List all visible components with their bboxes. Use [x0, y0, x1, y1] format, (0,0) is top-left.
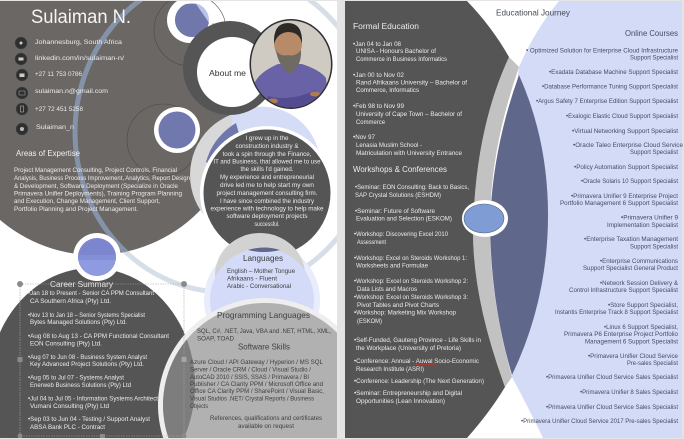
panel: career summary circle — [0, 268, 195, 438]
text: contact details: linkedin.com/in/sulaiman-n/ — [35, 55, 124, 62]
text: workshops list: Worksheets and Formulae — [356, 262, 428, 270]
panel: languages — [204, 233, 320, 316]
text: expertise list: and Execution, Change Management, Client Support, — [14, 198, 160, 205]
text: software list: AutoCAD 2010 / SSIS, SSAS / Primavera / BI — [190, 374, 309, 381]
text: online courses list: Implementation Specialist — [607, 222, 678, 229]
panel: online courses background — [500, 1, 682, 438]
text: online courses list: •Oracle Taleo Enterprise Cloud Service — [573, 142, 683, 149]
text: about me body — [210, 135, 324, 228]
text: languages list — [227, 268, 295, 288]
heading: programming languages: Programming Languages — [217, 310, 310, 320]
text: contact details: +27 72 451 5258 — [35, 106, 83, 113]
text: about me body: construction industry & — [236, 143, 299, 150]
text: career list: •Sep 03 to Jun 04 - Testing / Support Analyst — [28, 416, 150, 423]
text: workshops list: •Workshop: Excel on Steroids Workshop 2: — [354, 278, 468, 285]
text: online courses list: Instantis Enterprise Track 8 Support Specialist — [555, 309, 678, 316]
text: contact details — [35, 39, 124, 131]
text: about me body: successful. — [254, 221, 280, 228]
text: workshops list: Data Lists and Macros — [357, 286, 418, 293]
heading: workshops and conferences: Workshops & Conferences — [353, 164, 447, 174]
text: references note: available on request — [238, 423, 294, 430]
text: languages list: English – Mother Tongue — [227, 268, 295, 275]
text: software list: Azure Cloud / API Gateway / Hyperion / MS SQL — [190, 359, 323, 366]
text: references note: References, qualifications and certificates — [210, 415, 323, 422]
text: about me body: drive led me to help start my own — [220, 182, 314, 189]
text: about me body: experience with technology to help make — [210, 206, 324, 212]
text: workshops list: Research Institute (ASRI) — [356, 366, 424, 373]
text: career list: CA Southern Africa (Pty) Ltd. — [30, 298, 111, 305]
heading: about me: About me — [209, 69, 247, 78]
text: career list: ABSA Bank PLC - Contract — [30, 424, 105, 431]
decorative ring, light section — [123, 1, 337, 293]
text: workshops list: •Self-Funded, Gauteng Province - Life Skills in — [354, 337, 481, 344]
text: online courses list: Primavera P6 Enterprise Project Portfolio — [564, 331, 678, 338]
panel: header and expertise circle — [0, 1, 230, 254]
text: workshops list: •Conference: Leadership (The Next Generation) — [354, 378, 484, 385]
text: formal education list: •Feb 98 to Nov 99 — [353, 103, 404, 110]
text: online courses list: •Virtual Networking Support Specialist — [572, 128, 678, 135]
outline circle middle — [127, 104, 199, 176]
text: workshops list: Assessment — [357, 239, 386, 246]
text: workshops list: •Workshop: Discovering Excel 2010 — [354, 231, 448, 238]
text: programming list: SOAP, TOAD — [197, 336, 234, 342]
text: online courses list: •Exadata Database Machine Support Specialist — [549, 69, 678, 76]
text: formal education list: Matriculation with University Entrance — [356, 150, 462, 157]
text: online courses list: Control Infrastructure Support Specialist — [569, 287, 678, 294]
text: software list: Server / Oracle CRM / Cloud / Visual Studio / — [190, 366, 311, 374]
text: career list: •Aug 08 to Aug 13 - CA PPM Functional Consultant — [28, 333, 169, 340]
bubble: centre blue ellipse — [462, 200, 508, 237]
text: career list: Key Advanced Project Solutions (Pty) Ltd. — [30, 361, 144, 368]
text: languages list: Arabic - Conversational — [227, 283, 292, 290]
icons: contact — [15, 37, 28, 135]
text: languages list: Afrikaans - Fluent — [227, 276, 277, 282]
text: workshops list: Evaluation and Selection (ESKOM) — [356, 216, 452, 222]
heading: educational journey: Educational Journey — [496, 8, 571, 18]
heading: online courses: Online Courses — [625, 28, 678, 38]
text: workshops list: •Workshop: Excel on Steroids Workshop 1: — [354, 255, 467, 262]
text: formal education list: •Jan 00 to Nov 02 — [353, 72, 404, 79]
text: expertise list — [14, 167, 190, 213]
backdrop circles behind about text — [190, 106, 318, 215]
text: about me body: I have since combined the industry — [220, 198, 315, 205]
text: workshops list: SAP Crystal Solutions (ESHDM) — [355, 192, 441, 199]
text: formal education list: Commerce, Informatics — [356, 87, 420, 94]
page: right sheet — [345, 1, 683, 438]
text: online courses list: •Enterprise Communications — [600, 258, 679, 265]
text: workshops list: •Workshop: Marketing Mix Workshop — [354, 310, 456, 316]
heading: software skills: Software Skills — [238, 342, 290, 352]
text: online courses list: •Enterprise Taxation Management — [584, 236, 678, 243]
text: career list: EON Consulting (Pty) Ltd. — [30, 340, 102, 348]
bubble: top blue circle — [167, 0, 214, 43]
text: online courses list: •Exalogic Elastic Cloud Support Specialist — [566, 113, 678, 120]
text: about me body: IT and Business, that allowed me to use — [214, 158, 321, 166]
text: online courses list: Support Specialist — [630, 244, 678, 250]
text: career list: •Jan 18 to Present - Senior CA PPM Consultant — [28, 290, 154, 297]
heading: formal education: Formal Education — [353, 21, 419, 31]
text: formal education list: Commerce — [356, 119, 385, 126]
text: about me body: My experience and entrepreneurial — [220, 174, 315, 181]
text: formal education list: •Jan 04 to Jan 08 — [353, 41, 401, 48]
text: online courses list: •Argus Safety 7 Enterprise Edition Support Specialist — [536, 98, 678, 105]
text: software list: Objects — [190, 403, 209, 410]
text: online courses list: •Primavera Unifier 8 Sales Specialist — [580, 389, 678, 396]
text: online courses list — [521, 48, 683, 425]
text: career list: Enerweb Business Solutions (Pty) Ltd — [30, 382, 131, 389]
bubble: middle blue circle — [154, 107, 200, 153]
panel: about text circle — [200, 126, 330, 250]
text: expertise list: Primavera Unifier Deployments), Training Program Planning — [14, 190, 182, 198]
text: career list: •Aug 07 to Jun 08 - Business System Analyst — [28, 354, 147, 361]
text: about me body: software deployment projects — [226, 213, 308, 220]
text: software list: Visual Studios .NET/ Crystal Reports / Business — [190, 396, 315, 402]
text: workshops list: (ESKOM) — [357, 318, 382, 325]
panel: about me ring — [183, 21, 266, 115]
text: expertise list: Portfolio Planning and Project Management. — [14, 206, 138, 213]
text: online courses list: Management 6 Support Specialist — [585, 338, 678, 346]
text: workshops list: Opportunities (Lean Innovation) — [356, 398, 445, 405]
text: about me body: I grew up in the — [246, 135, 289, 142]
outline circle top — [154, 0, 226, 66]
text: contact details: sulaiman.n@gmail.com — [35, 88, 108, 95]
text: expertise list: Project Management Consulting, Project Controls, Financial — [14, 167, 178, 174]
text: online courses list: •Primavera Unifier 9 Enterprise Project — [571, 193, 678, 200]
text: contact details: +27 11 753 0786 — [35, 71, 82, 78]
text: workshops list: the Workplace (University of Pretoria) — [356, 345, 461, 352]
text: workshops list: •Seminar: Entrepreneurship and Digital — [354, 390, 463, 397]
text: career list — [28, 290, 169, 431]
panel: skills circle — [158, 298, 337, 438]
text: formal education list: Lenasia Muslim School - — [356, 142, 422, 149]
text: online courses list: • Optimized Solution for Enterprise Cloud Infrastructure — [526, 48, 678, 54]
heading: languages: Languages — [243, 253, 283, 263]
text: career list: Bytes Managed Solutions (Pty) Ltd. — [30, 319, 127, 326]
text: online courses list: •Policy Automation Support Specialist — [574, 164, 678, 171]
text: contact details: Johannesburg, South Africa — [35, 39, 122, 46]
text: online courses list: •Network Session Delivery & — [600, 280, 679, 287]
panel: education background — [345, 1, 509, 438]
text: formal education list: Commerce in Business Informatics — [356, 56, 448, 63]
heading: areas of expertise: Areas of Expertise — [16, 148, 80, 158]
text: formal education list — [353, 41, 467, 157]
text: software list: Office CA Clarity PPM / SharePoint / Visual Basic, — [190, 388, 324, 395]
text: online courses list: Support Specialist General Product — [583, 265, 678, 272]
decorative band — [473, 57, 519, 387]
text: programming list: SQL, C#, .NET, Java, VBA and .NET, HTML, XML, — [197, 328, 331, 335]
text: online courses list: Support Specialist — [630, 149, 678, 156]
photo: portrait — [250, 19, 332, 110]
text: online courses list: •Database Performance Tuning Support Specialist — [542, 84, 678, 90]
text: workshops list: •Seminar: Future of Software — [355, 208, 435, 215]
text: online courses list: •Store Support Specialist, — [608, 302, 678, 309]
text: contact details: Sulaiman_n — [36, 124, 74, 131]
text: workshops list: •Conference: Annual - Auwal Socio-Economic — [354, 358, 480, 365]
shape: blue lens — [490, 75, 548, 375]
text: formal education list: •Nov 97 — [353, 134, 375, 141]
text: about me body: project management consulting firm. — [216, 190, 318, 197]
text: online courses list: Portfolio Management 6 Support Specialist — [560, 200, 678, 207]
text: expertise list: & Development, Software Deployment (Specialize in Oracle — [14, 183, 178, 190]
text: references note — [210, 415, 323, 430]
page: left sheet — [0, 1, 337, 438]
title: name: Sulaiman N. — [31, 7, 131, 28]
text: online courses list: •Primavera Unifier Cloud Service — [588, 353, 678, 360]
text: workshops list — [354, 184, 484, 405]
text: online courses list: Support Specialist — [630, 54, 678, 62]
text: expertise list: Analysis, Business Process Improvement, Analytics, Report Design — [14, 175, 190, 182]
spelling underline — [416, 364, 436, 366]
selection frame — [17, 281, 187, 438]
text: about me body: the skills I'd gained. — [240, 166, 294, 173]
text: career list: •Jul 04 to Jul 05 - Information Systems Architect — [28, 396, 158, 402]
text: online courses list: •Primavera Unifier 9 — [621, 214, 678, 222]
text: about me body: took a spin through the Finance, — [222, 151, 312, 158]
text: workshops list: Pivot Tables and Pivot Charts — [357, 302, 440, 309]
text: career list: •Nov 13 to Jan 18 – Senior Systems Specialist — [28, 312, 145, 319]
text: online courses list: Pre-sales Specialist — [627, 360, 678, 367]
bubble: career blue circle — [73, 233, 121, 281]
heading: career summary: Career Summary — [50, 280, 113, 289]
text: online courses list: •Linux 6 Support Specialist, — [604, 324, 678, 331]
text: software list — [190, 359, 324, 410]
text: workshops list: •Seminar: EON Consulting: Back to Basics, — [355, 184, 469, 191]
text: software list: Publisher / CA Clarity PPM / Microsoft Office and — [190, 381, 323, 388]
text: workshops list: •Workshop: Excel on Steroids Workshop 3: — [354, 294, 468, 301]
text: formal education list: Rand Afrikaans University – Bachelor of — [356, 80, 467, 86]
text: formal education list: University of Cape Town – Bachelor of — [356, 111, 462, 118]
text: career list: Vumani Consulting (Pty) Ltd — [30, 403, 109, 410]
text: formal education list: UNISA - Honours Bachelor of — [356, 48, 436, 55]
text: career list: •Aug 05 to Jul 07 - Systems Analyst — [28, 374, 124, 382]
text: programming list — [197, 328, 330, 342]
